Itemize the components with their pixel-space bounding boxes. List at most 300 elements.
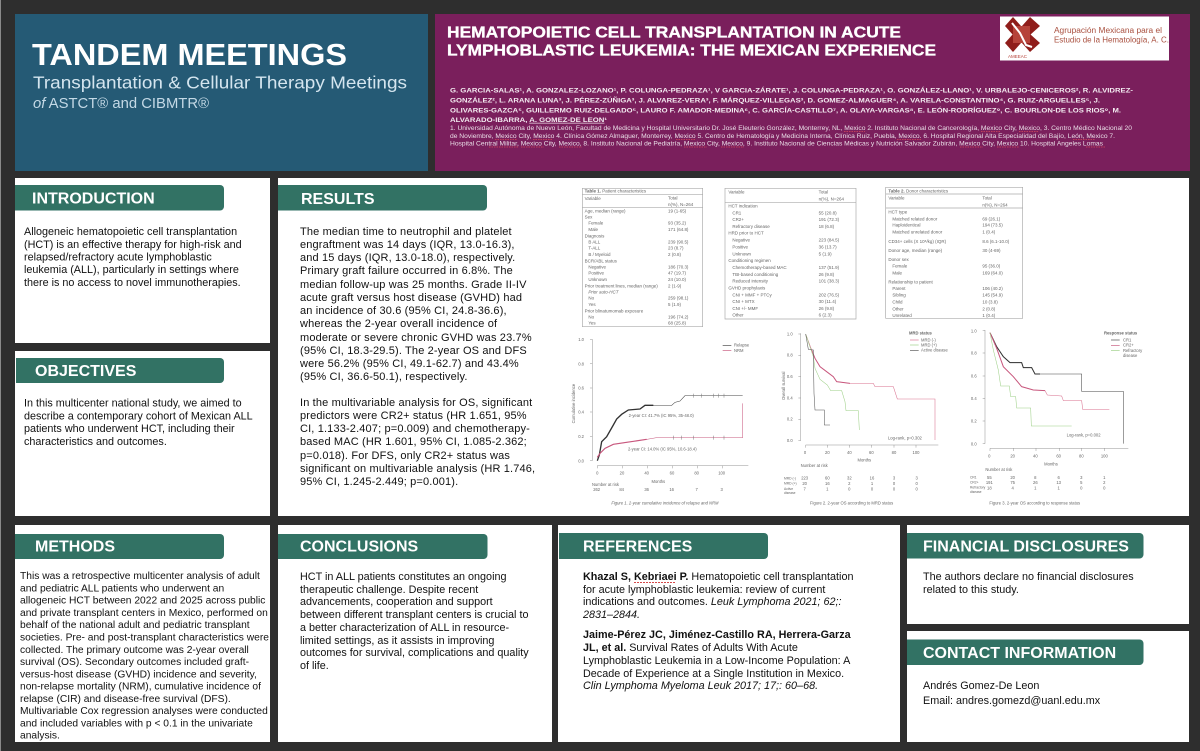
chart: figure 2 overall survival according to MRD status: 1.0: [787, 331, 793, 336]
chart: figure 2 overall survival according to MRD status: MRD (+): [921, 342, 937, 347]
panel: poster title header: [435, 14, 1190, 171]
methods text: collected. The primary outcome was 2-year overall: [20, 645, 249, 656]
chart: figure 1 cumulative incidence of relapse and NRM: 100: [718, 471, 726, 476]
chart: figure 1 cumulative incidence of relapse and NRM: 0.6: [578, 386, 585, 391]
chart: figure 3 overall survival according to response status: 55: [987, 475, 992, 480]
results text: In the multivariable analysis for OS, significant: [300, 397, 532, 409]
table 2: transplant characteristics: 36 (13.7): [819, 244, 837, 249]
chart: figure 1 cumulative incidence of relapse and NRM: 84: [619, 487, 625, 492]
chart: figure 3 overall survival according to response status: 26: [1033, 480, 1038, 485]
chart: figure 2 overall survival according to MRD status: 80: [892, 450, 897, 455]
table 3: donor characteristics: 10 (3.8): [982, 300, 998, 305]
introduction text: relapsed/refractory acute lymphoblastic: [24, 252, 212, 264]
chart: figure 1 cumulative incidence of relapse and NRM: 20: [620, 471, 625, 476]
chart: figure 3 overall survival according to response status: Refractory: [1123, 348, 1143, 353]
affiliations: Hospital Central Militar, Mexico City, Mexico, 8. Instituto Nacional de Pediatría, Mexico City, Mexico, 9. Instituto Nacional de Ciencias Médicas y Nutrición Salvador Zubirán, Mexico City, Mexico 10. Hospital Angeles Lomas: [450, 141, 1103, 148]
results text: and 15 days (IQR, 13.0-18.0), respectively.: [300, 252, 515, 264]
heading: methods: [15, 534, 224, 559]
table 1: patient characteristics: Total: [668, 196, 677, 201]
panel: conclusions: [278, 525, 552, 742]
chart: figure 3 overall survival according to response status: 3: [1080, 475, 1083, 480]
reference 2: [583, 629, 852, 692]
chart: figure 3 overall survival according to response status: 0: [1080, 485, 1083, 490]
reference 1: 2831–2844.: [582, 609, 640, 621]
chart: figure 1 cumulative incidence of relapse and NRM: 80: [694, 471, 700, 476]
author list: OLIVARES-GAZCA⁵, GUILLERMO RUIZ-DELGADO⁵, LAURO F. AMADOR-MEDINA⁶, C. GARCÍA-CASTILLO⁷, A. OLAYA-VARGAS⁸, E. LEÓN-RODRÍGUEZ⁹, C. BOURLON-DE LOS RIOS⁹, M.: [450, 106, 1121, 114]
methods text: relapse (CIR) and disease-free survival (DFS).: [20, 694, 231, 705]
chart: figure 3 overall survival according to response status: 1: [1103, 475, 1106, 480]
chart: figure 3 overall survival according to response status: 18: [987, 485, 992, 490]
conclusions text: therapeutic challenge. Despite recent: [300, 584, 478, 596]
table 2: transplant characteristics: 55 (20.8): [819, 210, 837, 215]
chart: figure 3 overall survival according to response status: Refractory: [970, 486, 986, 490]
panel: objectives: [15, 351, 270, 516]
chart: figure 1 cumulative incidence of relapse and NRM: 0.4: [578, 410, 585, 415]
chart: figure 1 cumulative incidence of relapse and NRM: 7: [696, 487, 699, 492]
table 1: patient characteristics: 2 (1-9): [668, 283, 682, 288]
contact details: Email: andres.gomezd@uanl.edu.mx: [923, 695, 1101, 707]
table 1: patient characteristics: 2 (0.8): [668, 252, 681, 257]
chart: figure 3 overall survival according to response status: [970, 328, 1143, 505]
chart: figure 2 overall survival according to MRD status: 3: [916, 476, 919, 481]
chart: figure 3 overall survival according to response status: 0.6: [971, 374, 977, 379]
panel: introduction: [15, 178, 270, 343]
methods text: and private transplant centers in Mexico, performed on: [20, 608, 268, 619]
chart: figure 1 cumulative incidence of relapse and NRM: 2-year CI: 41.7% (IC 95%, 35-48.0): [629, 413, 694, 418]
methods text: [20, 571, 269, 742]
chart: figure 3 overall survival according to response status: 80: [1079, 454, 1084, 459]
conference societies: of ASTCT® and CIBMTR®: [33, 95, 209, 112]
disclosure text: [923, 571, 1134, 596]
poster title: LYMPHOBLASTIC LEUKEMIA: THE MEXICAN EXPERIENCE: [447, 42, 936, 60]
table 1: patient characteristics: Male: [588, 227, 599, 232]
author list: [450, 86, 1133, 124]
chart: figure 2 overall survival according to MRD status: 7: [804, 486, 807, 491]
heading: introduction: INTRODUCTION: [32, 190, 155, 208]
chart: figure 3 overall survival according to response status: 75: [1010, 480, 1016, 485]
conclusions text: limited settings, as it assists in improving: [300, 635, 494, 647]
chart: figure 3 overall survival according to response status: 1: [1034, 485, 1037, 490]
results text: 95% CI, 1.245-2.449; p=0.001).: [300, 476, 458, 488]
table 2: transplant characteristics: CR2+: [732, 217, 744, 222]
table 3: donor characteristics: Table 2. Donor characteristics: [888, 189, 949, 194]
introduction text: Allogeneic hematopoietic cell transplantation: [24, 226, 237, 238]
chart: figure 3 overall survival according to response status: 4: [1012, 485, 1015, 490]
chart: figure 2 overall survival according to MRD status: 3: [893, 476, 896, 481]
table 1: patient characteristics: T-ALL: [588, 246, 601, 251]
chart: figure 2 overall survival according to MRD status: 2: [848, 481, 851, 486]
table 3: donor characteristics: Child: [892, 300, 903, 305]
table 3: donor characteristics: 169 (64.0): [982, 271, 1003, 276]
panel: financial disclosures: [907, 525, 1189, 624]
panel: results: [278, 178, 1189, 516]
conclusions text: [300, 571, 529, 672]
chart: figure 1 cumulative incidence of relapse and NRM: NRM: [734, 348, 744, 353]
chart: figure 3 overall survival according to response status: 1.0: [971, 328, 977, 333]
chart: figure 2 overall survival according to MRD status: 16: [870, 476, 875, 481]
chart: figure 2 overall survival according to MRD status: MRD (-): [921, 337, 936, 342]
table 3: donor characteristics: 8.6 (6.1-10.0): [982, 239, 1010, 244]
chart: figure 3 overall survival according to response status: CR2+: [1123, 343, 1134, 348]
results text: median follow-up was 25 months. Grade II-IV: [300, 279, 527, 291]
table 2: transplant characteristics: TBI-based conditioning: [732, 272, 779, 277]
table 2: transplant characteristics: CNI + MTX: [732, 299, 755, 304]
table 3: donor characteristics: Matched related donor: [892, 216, 938, 221]
results text: (95% CI, 36.6-50.1), respectively.: [300, 371, 468, 383]
reference 2: Lymphoblastic Leukemia in a Low-Income Population: A: [583, 655, 851, 667]
chart: figure 3 overall survival according to response status: 0: [988, 454, 991, 459]
methods text: Multivariable Cox regression analyses were conducted: [20, 706, 268, 717]
conclusions text: advancements, cooperation and support: [300, 596, 493, 608]
table 2: transplant characteristics: 6 (2.3): [819, 313, 832, 318]
chart: figure 2 overall survival according to MRD status: 1: [826, 486, 829, 491]
affiliations: [450, 125, 1133, 148]
heading: conclusions: CONCLUSIONS: [300, 539, 419, 556]
chart: figure 1 cumulative incidence of relapse and NRM: 40: [644, 471, 650, 476]
table 2: transplant characteristics: HCT indication: [728, 203, 758, 208]
chart: figure 3 overall survival according to response status: Log-rank, p=0.002: [1067, 432, 1101, 437]
chart: figure 1 cumulative incidence of relapse and NRM: 36: [644, 487, 650, 492]
table 3: donor characteristics: Matched unrelated donor: [892, 230, 943, 235]
table 3: donor characteristics: Relationship to patient: [888, 280, 933, 285]
chart: figure 3 overall survival according to response status: 5: [1080, 480, 1083, 485]
table 3: donor characteristics: Female: [892, 264, 908, 269]
heading: financial disclosures: FINANCIAL DISCLOSURES: [923, 539, 1129, 556]
table 3: donor characteristics: 1 (0.4): [982, 230, 996, 235]
chart: figure 3 overall survival according to response status: Months: [1044, 461, 1058, 466]
chart: figure 2 overall survival according to MRD status: [781, 331, 948, 505]
chart: figure 2 overall survival according to MRD status: 0.0: [787, 438, 793, 443]
reference 2: JL, et al. Survival Rates of Adults With Acute: [583, 642, 798, 654]
table 3: donor characteristics: HCT type: [888, 210, 908, 215]
chart: figure 3 overall survival according to response status: 13: [1056, 480, 1062, 485]
table 2: transplant characteristics: Negative: [732, 238, 751, 243]
conclusions text: HCT in ALL patients constitutes an ongoing: [300, 571, 506, 583]
affiliations: 1. Universidad Autónoma de Nuevo León, Facultad de Medicina y Hospital Universitario Dr. José Eleuterio González, Monterrey, NL, Mexico 2. Instituto Nacional de Cancerología, Mexico City, Mexico, 3. Centro Médico Nacional 20: [450, 125, 1133, 132]
results text: p=0.018). For DFS, only CR2+ status was: [300, 450, 510, 462]
chart: figure 2 overall survival according to MRD status: 20: [802, 481, 808, 486]
contact details: [923, 680, 1101, 707]
table 2: transplant characteristics: CNI +/- MMF: [732, 306, 758, 311]
objectives text: patients who underwent HCT, including their: [24, 423, 235, 435]
chart: figure 2 overall survival according to MRD status: 60: [825, 476, 830, 481]
chart: figure 3 overall survival according to response status: CR1: [970, 476, 977, 480]
chart: figure 2 overall survival according to MRD status: Overall survival: [781, 372, 786, 400]
table 2: transplant characteristics: 26 (9.8): [819, 306, 835, 311]
reference 1: Khazal S, Kebriaei P. Hematopoietic cell transplantation: [583, 571, 853, 583]
chart: figure 3 overall survival according to response status: 8: [1034, 475, 1037, 480]
table 1: patient characteristics: Yes: [588, 302, 596, 307]
table 3: donor characteristics: 95 (36.0): [982, 264, 1001, 269]
chart: figure 2 overall survival according to MRD status: 0: [893, 486, 896, 491]
table 1: patient characteristics: Variable: [585, 196, 601, 201]
author list: GONZÁLEZ², L. ARANA LUNA³, J. PÉREZ-ZÚÑIGA³, J. ALVAREZ-VERA³, F. MÁRQUEZ-VILLEGAS³, D. GOMEZ-ALMAGUER⁴, A. VARELA-CONSTANTINO⁴, G. RUIZ-ARGUELLES⁵, J.: [450, 96, 1100, 104]
contact details: Andrés Gomez-De Leon: [923, 680, 1039, 692]
chart: figure 3 overall survival according to response status: 0.2: [971, 419, 977, 424]
table 1: patient characteristics: BCR/ABL status: [585, 258, 618, 263]
results text: were 56.2% (95% CI, 49.1-62.7) and 43.4%: [299, 358, 519, 370]
chart: figure 2 overall survival according to MRD status: MRD (+): [784, 482, 797, 486]
table 1: patient characteristics: n(%), N=264: [668, 202, 694, 207]
disclosure text: related to this study.: [923, 584, 1019, 596]
chart: figure 2 overall survival according to MRD status: 0: [916, 486, 919, 491]
table 3: donor characteristics: Total: [982, 196, 992, 201]
table 1: patient characteristics: Prior blinatumomab exposure: [585, 308, 644, 313]
chart: figure 2 overall survival according to MRD status: 100: [913, 450, 920, 455]
chart: figure 3 overall survival according to response status: disease: [970, 490, 982, 494]
author list: ALVARADO-IBARRA, A. GOMEZ-DE LEON ¹: [450, 117, 608, 124]
results text: significant on multivariable analysis (HR 1.746,: [300, 463, 535, 475]
table 3: donor characteristics: CD34+ cells (X 10⁶/kg) (IQR): [888, 239, 947, 244]
table 2: transplant characteristics: Positive: [732, 244, 749, 249]
heading: contact information: [907, 640, 1144, 665]
chart: figure 2 overall survival according to MRD status: 0.2: [787, 417, 793, 422]
objectives text: describe a contemporary cohort of Mexican ALL: [24, 410, 253, 422]
table 2: transplant characteristics: 30 (11.4): [819, 299, 837, 304]
conference name: TANDEM MEETINGS: [32, 38, 347, 72]
poster title: HEMATOPOIETIC CELL TRANSPLANTATION IN ACUTE: [447, 24, 901, 42]
logo: hematology association: AMEEAC: [1008, 54, 1028, 59]
chart: figure 3 overall survival according to response status: CR1: [1123, 337, 1132, 342]
results text: engraftment was 14 days (IQR, 13.0-16.3),: [300, 239, 515, 251]
methods text: and included variables with p < 0.1 in the univariate: [20, 718, 253, 729]
chart: figure 3 overall survival according to response status: 6: [1058, 475, 1061, 480]
methods text: versus-host disease (GVHD) incidence and severity,: [20, 669, 257, 680]
methods text: This was a retrospective multicenter analysis of adult: [20, 571, 260, 582]
logo: hematology association: Estudio de la Hematología, A. C.: [1054, 36, 1169, 44]
chart: figure 3 overall survival according to response status: 0.0: [971, 441, 977, 446]
chart: figure 1 cumulative incidence of relapse and NRM: Cumulative incidence: [571, 383, 576, 423]
table 2: transplant characteristics: Reduced intensity: [732, 279, 769, 284]
table 1: patient characteristics: Unknown: [588, 277, 608, 282]
methods text: analysis.: [20, 731, 60, 742]
methods text: and pediatric ALL patients who underwent an: [20, 583, 224, 594]
table 1: patient characteristics: [582, 188, 703, 327]
introduction text: (HCT) is an effective therapy for high-risk and: [24, 239, 242, 251]
chart: figure 2 overall survival according to MRD status: 1: [871, 481, 874, 486]
methods text: survival (OS). Secondary outcomes included graft-: [20, 657, 249, 668]
table 1: patient characteristics: 196 (74.2): [668, 314, 689, 319]
methods text: allogeneic HCT between 2022 and 2025 across public: [20, 596, 265, 607]
results text: moderate or severe chronic GVHD was 23.7%: [300, 332, 532, 344]
introduction text: [24, 226, 242, 289]
table 1: patient characteristics: 68 (25.8): [668, 321, 686, 326]
chart: figure 2 overall survival according to MRD status: MRD (-): [784, 476, 796, 480]
chart: figure 2 overall survival according to MRD status: 0: [871, 486, 874, 491]
table 1: patient characteristics: Age, median (range): [585, 208, 626, 213]
chart: figure 3 overall survival according to response status: 191: [986, 480, 993, 485]
table 3: donor characteristics: 194 (73.5): [982, 223, 1003, 228]
chart: figure 2 overall survival according to MRD status: 0: [804, 450, 807, 455]
table 1: patient characteristics: 19 (1-65): [668, 208, 687, 213]
chart: figure 3 overall survival according to response status: Number at risk: [985, 467, 1013, 472]
table 2: transplant characteristics: 202 (76.5): [819, 292, 840, 297]
table 1: patient characteristics: Negative: [588, 264, 607, 269]
chart: figure 3 overall survival according to response status: disease: [1123, 353, 1138, 358]
heading: methods: METHODS: [35, 539, 115, 556]
reference 1: [582, 571, 853, 621]
chart: figure 3 overall survival according to response status: 2: [1103, 480, 1106, 485]
table 3: donor characteristics: n(%), N=264: [982, 202, 1008, 207]
table 1: patient characteristics: 259 (98.1): [668, 296, 689, 301]
heading: references: [559, 533, 768, 559]
chart: figure 2 overall survival according to MRD status: Figure 2. 2-year OS according to MRD status: [810, 500, 893, 505]
chart: figure 1 cumulative incidence of relapse and NRM: 0.8: [578, 361, 585, 366]
chart: figure 2 overall survival according to MRD status: 0.8: [787, 353, 793, 358]
table 2: transplant characteristics: GVHD prophylaxis: [728, 286, 766, 291]
chart: figure 2 overall survival according to MRD status: 223: [801, 476, 809, 481]
table 3: donor characteristics: Haploidentical: [892, 223, 921, 228]
chart: figure 3 overall survival according to response status: 20: [1010, 454, 1016, 459]
table 2: transplant characteristics: 18 (6.8): [819, 224, 835, 229]
table 2: transplant characteristics: Conditioning regimen: [728, 258, 771, 263]
panel: conference banner: [15, 14, 428, 171]
table 1: patient characteristics: No: [588, 314, 595, 319]
chart: figure 3 overall survival according to response status: 100: [1101, 454, 1108, 459]
table 1: patient characteristics: Diagnosis: [585, 233, 605, 238]
chart: figure 2 overall survival according to MRD status: 0: [893, 481, 896, 486]
table 2: transplant characteristics: Other: [732, 313, 744, 318]
author list: G. GARCIA-SALAS¹, A. GONZALEZ-LOZANO¹, P. COLUNGA-PEDRAZA¹, V GARCIA-ZÁRATE¹, J. COLUNGA-PEDRAZA¹, O. GONZÁLEZ-LLANO¹, V. URBALEJO-CENICEROS², R. ALVIDREZ-: [450, 86, 1133, 94]
table 3: donor characteristics: 145 (54.9): [982, 293, 1003, 298]
table 3: donor characteristics: Sibling: [892, 293, 906, 298]
panel: references: [558, 525, 900, 742]
table 1: patient characteristics: Prior auto-HCT: [588, 290, 619, 295]
heading: conclusions: [278, 534, 488, 559]
chart: figure 2 overall survival according to MRD status: 0: [848, 486, 851, 491]
table 1: patient characteristics: 93 (35.2): [668, 221, 686, 226]
chart: figure 1 cumulative incidence of relapse and NRM: 16: [669, 487, 675, 492]
chart: figure 2 overall survival according to MRD status: Active: [784, 487, 793, 491]
chart: figure 1 cumulative incidence of relapse and NRM: 60: [670, 471, 675, 476]
heading: financial disclosures: [907, 533, 1144, 558]
results text: an incidence of 30.6 (95% CI, 24.8-36.6),: [300, 305, 507, 317]
table 3: donor characteristics: Unrelated: [892, 313, 912, 318]
chart: figure 1 cumulative incidence of relapse and NRM: 3: [721, 487, 724, 492]
chart: figure 2 overall survival according to MRD status: 60: [869, 450, 874, 455]
chart: figure 1 cumulative incidence of relapse and NRM: Figure 1. 2-year cumulative incidence of relapse and NRM: [611, 501, 719, 506]
results text: predictors were CR2+ status (HR 1.651, 95%: [300, 410, 527, 422]
chart: figure 1 cumulative incidence of relapse and NRM: 0.0: [578, 458, 585, 463]
table 1: patient characteristics: Female: [588, 221, 604, 226]
table 3: donor characteristics: Donor age, median (range): [888, 248, 943, 253]
chart: figure 3 overall survival according to response status: 60: [1056, 454, 1062, 459]
table 1: patient characteristics: 24 (10.0): [668, 277, 686, 282]
table 3: donor characteristics: 1 (0.4): [982, 313, 996, 318]
introduction text: leukemia (ALL), particularly in settings where: [24, 264, 239, 276]
chart: figure 1 cumulative incidence of relapse and NRM: 0: [596, 471, 599, 476]
table 2: transplant characteristics: 26 (9.8): [819, 272, 835, 277]
table 2: transplant characteristics: n(%), N=264: [819, 197, 844, 202]
table 2: transplant characteristics: [725, 188, 856, 319]
results text: whereas the 2-year overall incidence of: [299, 318, 498, 330]
table 2: transplant characteristics: CR1: [732, 210, 742, 215]
results text: Primary graft failure occurred in 6.8%. The: [300, 265, 513, 277]
poster title: [447, 24, 936, 60]
heading: results: [278, 185, 487, 210]
chart: figure 1 cumulative incidence of relapse and NRM: 1.0: [578, 337, 585, 342]
conclusions text: outcomes for survival, complications and quality: [300, 647, 529, 659]
table 3: donor characteristics: Variable: [888, 196, 905, 201]
objectives text: [24, 398, 253, 448]
table 1: patient characteristics: No: [588, 296, 595, 301]
heading: results: RESULTS: [301, 191, 375, 208]
table 3: donor characteristics: [886, 187, 1023, 318]
table 2: transplant characteristics: 223 (84.5): [819, 238, 840, 243]
chart: figure 2 overall survival according to MRD status: 0.4: [787, 395, 793, 400]
results text: acute graft versus host disease (GVHD) had: [300, 292, 522, 304]
objectives text: In this multicenter national study, we aimed to: [24, 398, 242, 410]
chart: figure 2 overall survival according to MRD status: disease: [784, 491, 796, 495]
table 3: donor characteristics: 106 (40.2): [982, 286, 1003, 291]
table 2: transplant characteristics: Variable: [728, 190, 745, 195]
panel: contact information: [907, 631, 1189, 742]
table 3: donor characteristics: Male: [892, 271, 903, 276]
reference 1: for acute lymphoblastic leukemia: review of current: [583, 584, 825, 596]
chart: figure 2 overall survival according to MRD status: 16: [825, 481, 830, 486]
table 2: transplant characteristics: 191 (72.3): [819, 217, 840, 222]
chart: figure 3 overall survival according to response status: 1: [1058, 485, 1061, 490]
table 1: patient characteristics: 171 (64.8): [668, 227, 689, 232]
logo: hematology association: Agrupación Mexicana para el: [1054, 26, 1162, 35]
table 3: donor characteristics: 2 (0.8): [982, 306, 996, 311]
chart: figure 3 overall survival according to response status: 0.4: [971, 396, 977, 401]
conclusions text: of life.: [300, 660, 329, 672]
reference 2: Clin Lymphoma Myeloma Leuk 2017; 17;: 60–68.: [583, 680, 818, 692]
conclusions text: between different transplant centers is crucial to: [300, 609, 528, 621]
chart: figure 2 overall survival according to MRD status: Active disease: [921, 348, 948, 353]
chart: figure 2 overall survival according to MRD status: MRD status: [909, 331, 933, 336]
chart: figure 2 overall survival according to MRD status: 32: [847, 476, 852, 481]
panel: methods: [15, 525, 270, 742]
table 1: patient characteristics: Sex: [585, 214, 593, 219]
table 1: patient characteristics: 5 (1.9): [668, 302, 681, 307]
chart: figure 1 cumulative incidence of relapse and NRM: 262: [593, 487, 601, 492]
table 2: transplant characteristics: HRD prior to HCT: [728, 231, 764, 236]
chart: figure 2 overall survival according to MRD status: 40: [847, 450, 852, 455]
table 1: patient characteristics: 239 (90.5): [668, 239, 689, 244]
reference 2: Jaime-Pérez JC, Jiménez-Castillo RA, Herrera-Garza: [583, 629, 852, 641]
table 3: donor characteristics: 30 (4-69): [982, 248, 1001, 253]
table 2: transplant characteristics: Total: [819, 190, 828, 195]
table 1: patient characteristics: Yes: [588, 321, 596, 326]
table 1: patient characteristics: B / Myeloid: [588, 252, 611, 257]
chart: figure 2 overall survival according to MRD status: 0: [916, 481, 919, 486]
table 1: patient characteristics: B ALL: [588, 239, 601, 244]
chart: figure 3 overall survival according to response status: Figure 3. 2-year OS according to response status: [989, 500, 1080, 505]
results text: (95% CI, 18.3-29.5). The 2-year OS and DFS: [300, 345, 527, 357]
chart: figure 3 overall survival according to response status: 20: [1010, 475, 1016, 480]
table 1: patient characteristics: Table 1. Patient characteristics: [585, 189, 647, 194]
table 3: donor characteristics: Parent: [892, 286, 906, 291]
heading: references: REFERENCES: [583, 539, 693, 556]
methods text: non-relapse mortality (NRM), cumulative incidence of: [20, 682, 261, 693]
chart: figure 2 overall survival according to MRD status: Log-rank, p=0.302: [888, 435, 923, 440]
chart: figure 1 cumulative incidence of relapse and NRM: Months: [652, 479, 665, 484]
chart: figure 2 overall survival according to MRD status: Months: [858, 458, 871, 463]
table 3: donor characteristics: Donor sex: [888, 257, 910, 262]
chart: figure 1 cumulative incidence of relapse and NRM: Number at risk: [592, 482, 620, 487]
chart: figure 2 overall survival according to MRD status: 20: [825, 450, 830, 455]
table 1: patient characteristics: Positive: [588, 271, 605, 276]
table 1: patient characteristics: 47 (19.7): [668, 271, 686, 276]
table 2: transplant characteristics: 101 (38.3): [819, 279, 840, 284]
table 1: patient characteristics: Prior treatment lines, median (range): [585, 283, 658, 288]
chart: figure 3 overall survival according to response status: CR2+: [970, 481, 979, 485]
table 2: transplant characteristics: Refractory disease: [732, 224, 770, 229]
results text: [299, 226, 535, 488]
introduction text: there is no access to novel immunotherapies.: [24, 277, 241, 289]
